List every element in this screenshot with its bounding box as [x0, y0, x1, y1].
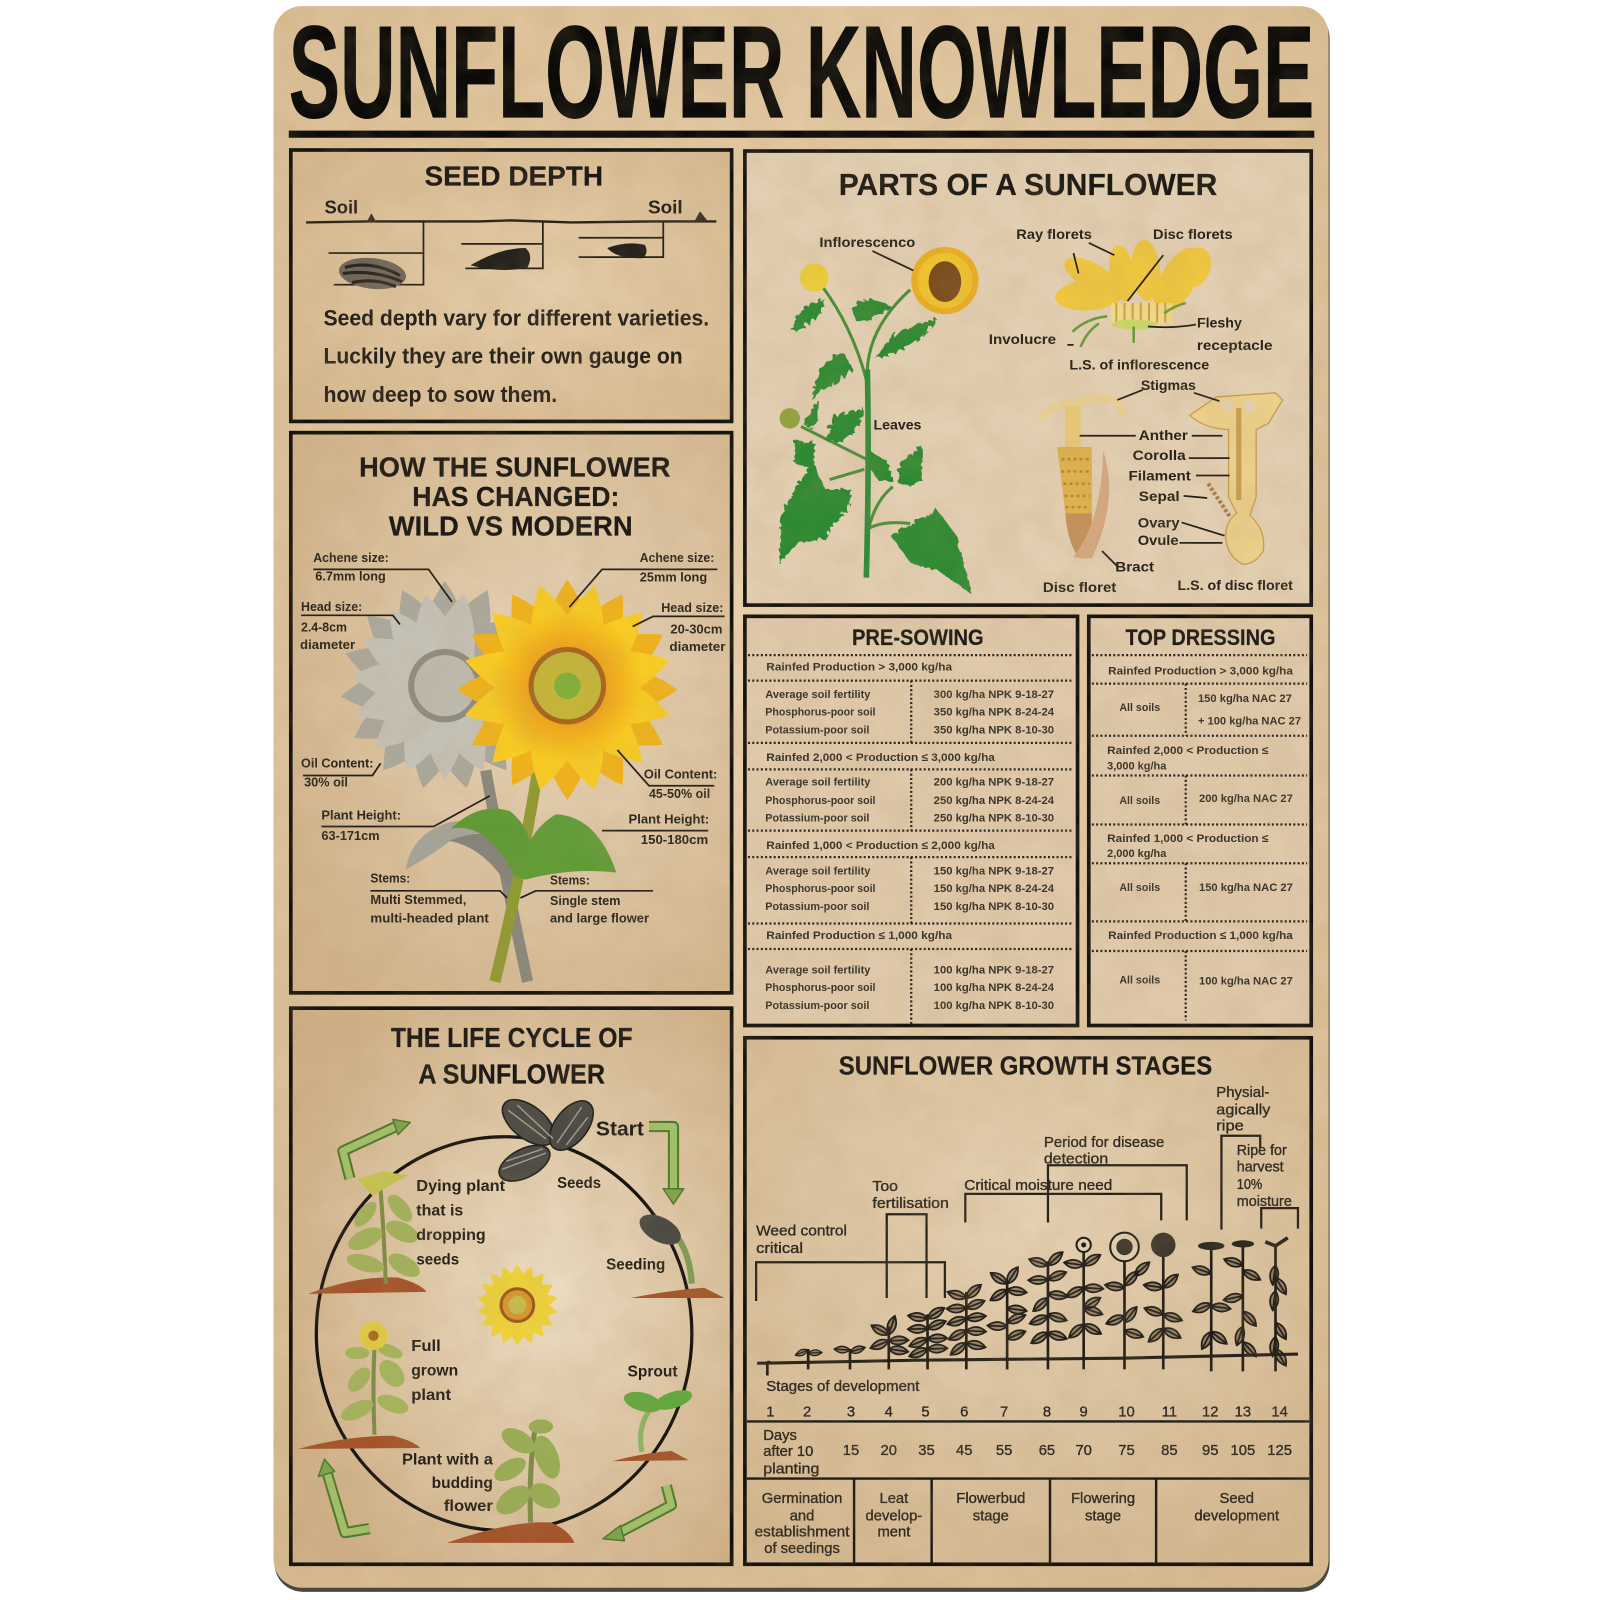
heading: wild vs modern: HAS CHANGED:: [412, 481, 619, 512]
growth phase cells: Flowerbud: [956, 1491, 1025, 1507]
period labels: moisture: [1237, 1194, 1292, 1210]
pre-sowing rows: 250 kg/ha NPK 8-24-24: [934, 795, 1055, 807]
pre-sowing rows: 100 kg/ha NPK 8-10-30: [934, 1000, 1054, 1012]
life cycle labels: Plant with a: [402, 1451, 493, 1468]
plant stage 12: [1191, 1242, 1232, 1371]
days after planting row: 125: [1267, 1443, 1292, 1459]
left annotations: wild: Head size:: [301, 599, 362, 614]
parts labels: Inflorescenco: [819, 235, 916, 251]
left annotations: wild: [300, 550, 507, 925]
left annotations: wild: 63-171cm: [321, 828, 380, 843]
pre-sowing rows: 150 kg/ha NPK 9-18-27: [934, 865, 1054, 877]
pre-sowing rows: Phosphorus-poor soil: [765, 706, 876, 718]
stages of development row: 14: [1271, 1404, 1288, 1420]
left annotations: wild: Multi Stemmed,: [370, 892, 466, 907]
parts labels: Ray florets: [1016, 227, 1092, 243]
stages of development row: 9: [1080, 1404, 1088, 1420]
pre-sowing rows: 300 kg/ha NPK 9-18-27: [934, 689, 1054, 701]
stages of development row: 7: [1000, 1404, 1008, 1420]
stages of development row: 3: [847, 1404, 855, 1420]
seed depth text: Seed depth vary for different varieties.: [323, 306, 709, 331]
right annotations: modern: Single stem: [550, 893, 620, 908]
pre-sowing rows: Phosphorus-poor soil: [765, 982, 876, 994]
days after planting row: planting: [763, 1461, 819, 1477]
heading: life cycle: THE LIFE CYCLE OF: [391, 1022, 633, 1053]
ground line: [757, 1354, 1298, 1363]
period brackets: [756, 1136, 1298, 1301]
right annotations: modern: Head size:: [661, 600, 723, 615]
life cycle labels: seeds: [416, 1251, 459, 1268]
icon: whole sunflower plant: [777, 247, 979, 592]
stages of development row: 1: [766, 1404, 775, 1420]
top dressing rows: [1107, 665, 1301, 988]
life cycle ring: [316, 1137, 692, 1531]
days after planting row: 35: [918, 1443, 935, 1459]
parts labels: L.S. of disc floret: [1178, 578, 1293, 594]
days after planting row: 85: [1161, 1443, 1178, 1459]
pre-sowing rows: 150 kg/ha NPK 8-24-24: [934, 883, 1055, 895]
pre-sowing rows: 350 kg/ha NPK 8-10-30: [934, 725, 1054, 737]
top dressing rows: Rainfed Production > 3,000 kg/ha: [1108, 665, 1294, 677]
top dressing rows: 200 kg/ha NAC 27: [1199, 793, 1293, 805]
period labels: agically: [1216, 1102, 1271, 1118]
top dressing rows: 3,000 kg/ha: [1107, 760, 1167, 772]
icon: center sunflower: [475, 1263, 559, 1347]
panel: life cycle: [291, 1008, 732, 1564]
heading: wild vs modern: WILD VS MODERN: [389, 511, 633, 542]
parts labels: Fleshy: [1197, 316, 1242, 332]
panel: growth stages: [745, 1038, 1311, 1564]
stages of development row: 12: [1202, 1404, 1218, 1420]
plant stage 11: [1143, 1233, 1183, 1369]
top dressing rows: 2,000 kg/ha: [1107, 848, 1167, 860]
period labels: Period for disease: [1044, 1135, 1164, 1151]
parts labels: Filament: [1129, 469, 1191, 485]
right annotations: modern: [520, 550, 726, 925]
stages of development row: 4: [885, 1404, 893, 1420]
life cycle labels: flower: [444, 1498, 493, 1515]
pre-sowing rows: Average soil fertility: [765, 865, 871, 877]
left annotations: wild: multi-headed plant: [370, 910, 490, 925]
left annotations: wild: 2.4-8cm: [301, 620, 347, 635]
pre-sowing rows: 350 kg/ha NPK 8-24-24: [934, 706, 1055, 718]
parts labels: Ovule: [1138, 533, 1179, 549]
pre-sowing rows: 150 kg/ha NPK 8-10-30: [934, 901, 1054, 913]
life cycle labels: plant: [411, 1387, 452, 1404]
left annotations: wild: diameter: [300, 637, 355, 652]
growth phase cells: development: [1194, 1508, 1279, 1524]
plant stage 3: [834, 1344, 866, 1369]
life cycle labels: budding: [432, 1475, 493, 1492]
period labels: detection: [1044, 1151, 1108, 1167]
heading: growth stages: SUNFLOWER GROWTH STAGES: [839, 1052, 1212, 1080]
life cycle labels: grown: [411, 1363, 458, 1380]
parts labels: Anther: [1139, 428, 1188, 444]
right annotations: modern: 20-30cm: [670, 622, 722, 637]
heading: seed depth: SEED DEPTH: [424, 161, 603, 192]
parts labels: receptacle: [1197, 338, 1273, 354]
seed depth diagram: Soil: [648, 196, 683, 217]
life cycle labels: Seeds: [557, 1175, 601, 1192]
days after planting row: Days: [763, 1428, 797, 1444]
heading: parts: PARTS OF A SUNFLOWER: [839, 168, 1217, 202]
period labels: 10%: [1237, 1177, 1262, 1193]
life cycle labels: Seeding: [606, 1256, 665, 1273]
top dressing rows: 100 kg/ha NAC 27: [1199, 976, 1293, 988]
right annotations: modern: diameter: [669, 639, 726, 654]
right annotations: modern: Stems:: [550, 873, 590, 888]
plant stage 13: [1223, 1240, 1262, 1371]
stages of development row: 2: [803, 1404, 811, 1420]
pre-sowing rows: Potassium-poor soil: [765, 812, 869, 824]
plant stage 1: [767, 1362, 770, 1376]
days after planting row: 20: [881, 1443, 897, 1459]
life cycle labels: Sprout: [628, 1364, 678, 1381]
title rule: [289, 131, 1314, 138]
days after planting row: 55: [996, 1443, 1012, 1459]
stages of development row: 6: [960, 1404, 968, 1420]
icon: seedling: [635, 1208, 692, 1284]
pre-sowing rows: Phosphorus-poor soil: [765, 883, 876, 895]
left annotations: wild: Plant Height:: [321, 807, 401, 822]
growth phase cells: and: [790, 1508, 814, 1524]
days after planting row: 95: [1202, 1443, 1218, 1459]
left annotations: wild: 6.7mm long: [315, 569, 386, 584]
stages of development row: 5: [921, 1404, 930, 1420]
period labels: Critical moisture need: [964, 1178, 1112, 1194]
days after planting row: [763, 1428, 1292, 1477]
life cycle labels: Dying plant: [416, 1178, 506, 1195]
heading: wild vs modern: HOW THE SUNFLOWER: [359, 452, 671, 483]
period labels: ripe: [1216, 1119, 1244, 1135]
top dressing rows: + 100 kg/ha NAC 27: [1198, 715, 1301, 727]
life cycle arrows: [318, 1119, 684, 1541]
top dressing rows: 150 kg/ha NAC 27: [1199, 882, 1293, 894]
top dressing rows: Rainfed Production ≤ 1,000 kg/ha: [1108, 930, 1294, 942]
pre-sowing rows: 100 kg/ha NPK 9-18-27: [934, 964, 1054, 976]
life cycle labels: [402, 1119, 678, 1515]
pre-sowing rows: 100 kg/ha NPK 8-24-24: [934, 982, 1055, 994]
growth phase cells: of seedings: [764, 1541, 840, 1557]
parts labels: Sepal: [1139, 489, 1180, 505]
pre-sowing rows: Rainfed Production ≤ 1,000 kg/ha: [766, 930, 953, 942]
pre-sowing rows: Potassium-poor soil: [765, 1000, 869, 1012]
growth phase cells: Germination: [762, 1491, 842, 1507]
pre-sowing rows: Average soil fertility: [765, 777, 871, 789]
parts labels: L.S. of inflorescence: [1069, 357, 1209, 373]
panel: sign background: [273, 6, 1329, 1588]
days after planting row: 15: [843, 1443, 859, 1459]
pre-sowing rows: Phosphorus-poor soil: [765, 795, 876, 807]
plant stage 9: [1063, 1238, 1104, 1369]
right annotations: modern: 45-50% oil: [649, 786, 710, 801]
left annotations: wild: Stems:: [370, 871, 410, 886]
panel: parts of a sunflower: [745, 151, 1311, 605]
plant stage 4: [869, 1315, 909, 1369]
period labels: Ripe for: [1237, 1143, 1287, 1159]
top dressing rows: 150 kg/ha NAC 27: [1198, 693, 1292, 705]
parts labels: Ovary: [1138, 516, 1180, 532]
growth phase cells: establishment: [755, 1525, 849, 1541]
left annotations: wild: Achene size:: [313, 550, 389, 565]
plant stage 10: [1104, 1233, 1153, 1369]
heading: wild vs modern: [359, 452, 671, 542]
top dressing rows: All soils: [1119, 795, 1160, 807]
pre-sowing rows: Potassium-poor soil: [765, 725, 869, 737]
left annotations: wild: Oil Content:: [301, 755, 373, 770]
growth phase cells: stage: [1085, 1508, 1121, 1524]
growth phase cells: Leat: [879, 1491, 908, 1507]
period labels: Too: [872, 1179, 898, 1195]
parts labels: Involucre: [989, 332, 1056, 348]
growth phase cells: Seed: [1219, 1491, 1254, 1507]
period labels: Weed control: [756, 1224, 847, 1240]
days after planting row: 65: [1039, 1443, 1055, 1459]
plant stage 5: [907, 1306, 948, 1369]
top dressing rows: All soils: [1119, 882, 1160, 894]
pre-sowing rows: Average soil fertility: [765, 964, 871, 976]
stages of development row: Stages of development: [766, 1379, 919, 1395]
icon: longitudinal section of inflorescence: [1054, 239, 1216, 347]
panel: seed depth: [291, 150, 732, 421]
period labels: Physial-: [1216, 1085, 1269, 1101]
icon: wild and modern sunflower illustration: [337, 579, 678, 982]
days after planting row: 75: [1118, 1443, 1135, 1459]
panel: how the sunflower has changed: [291, 433, 732, 993]
right annotations: modern: Plant Height:: [629, 811, 709, 826]
top dressing rows: Rainfed 2,000 < Production ≤: [1107, 745, 1268, 757]
pre-sowing rows: Rainfed Production > 3,000 kg/ha: [766, 661, 953, 673]
life cycle labels: Full: [411, 1338, 441, 1355]
pre-sowing rows: [765, 661, 1055, 1012]
parts labels: Stigmas: [1141, 378, 1196, 394]
pre-sowing rows: Average soil fertility: [765, 689, 871, 701]
icon: seeds: [493, 1091, 602, 1189]
stages of development row: 11: [1162, 1404, 1177, 1420]
heading: top dressing: TOP DRESSING: [1126, 625, 1276, 650]
heading: pre-sowing: PRE-SOWING: [852, 625, 984, 650]
panel: top dressing table: [1089, 616, 1311, 1026]
icon: sprout: [622, 1386, 694, 1452]
parts labels: Bract: [1115, 559, 1154, 575]
growth table rules: [747, 1421, 1309, 1564]
stages of development row: 8: [1043, 1404, 1051, 1420]
top dressing rows: All soils: [1119, 975, 1160, 987]
pre-sowing table rules: [748, 655, 1073, 1024]
parts labels: Leaves: [873, 418, 921, 434]
right annotations: modern: Achene size:: [640, 550, 714, 565]
right annotations: modern: Oil Content:: [644, 767, 717, 782]
seed depth text: [323, 306, 709, 407]
plant stage 6: [946, 1283, 987, 1369]
period labels: harvest: [1237, 1159, 1284, 1175]
icon: dying plant: [344, 1171, 424, 1284]
growth phase cells: [755, 1491, 1279, 1557]
pre-sowing rows: Rainfed 1,000 < Production ≤ 2,000 kg/ha: [766, 840, 996, 852]
plant stage 8: [1028, 1250, 1068, 1369]
pre-sowing rows: 250 kg/ha NPK 8-10-30: [934, 812, 1054, 824]
period labels: [756, 1085, 1292, 1257]
top dressing table rules: [1092, 655, 1307, 1020]
heading: life cycle: A SUNFLOWER: [418, 1059, 605, 1090]
period labels: critical: [756, 1241, 803, 1257]
top dressing rows: Rainfed 1,000 < Production ≤: [1107, 833, 1268, 845]
heading: life cycle: [391, 1022, 633, 1090]
life cycle labels: dropping: [416, 1227, 486, 1244]
seed depth text: how deep to sow them.: [323, 382, 557, 407]
growth phase cells: Flowering: [1071, 1491, 1135, 1507]
icon: soil mounds: [298, 1277, 724, 1543]
right annotations: modern: 150-180cm: [641, 832, 708, 847]
seed depth diagram: [306, 196, 716, 292]
growth phase cells: develop-: [866, 1508, 922, 1524]
parts labels: Disc florets: [1153, 227, 1233, 243]
days after planting row: after 10: [763, 1444, 813, 1460]
icon: disc floret: [1039, 390, 1143, 566]
parts labels: Corolla: [1133, 448, 1187, 464]
stages of development row: 13: [1235, 1404, 1251, 1420]
icon: section of disc floret: [1180, 393, 1283, 564]
paper texture: [273, 6, 1329, 1588]
period labels: fertilisation: [872, 1196, 949, 1212]
growth stage plants: [767, 1233, 1288, 1376]
growth phase cells: stage: [973, 1508, 1009, 1524]
seed depth diagram: Soil: [324, 196, 358, 217]
right annotations: modern: 25mm long: [640, 570, 707, 585]
plant stage 7: [987, 1265, 1028, 1369]
growth phase cells: ment: [877, 1525, 910, 1541]
life cycle labels: Start: [596, 1119, 644, 1141]
plant stage 14: [1265, 1238, 1288, 1371]
pre-sowing rows: Potassium-poor soil: [765, 901, 869, 913]
pre-sowing rows: 200 kg/ha NPK 9-18-27: [934, 777, 1054, 789]
icon: full grown plant: [338, 1321, 411, 1435]
seed depth text: Luckily they are their own gauge on: [323, 343, 683, 368]
parts labels: Disc floret: [1043, 580, 1117, 596]
right annotations: modern: and large flower: [550, 910, 649, 925]
days after planting row: 105: [1231, 1443, 1255, 1459]
left annotations: wild: 30% oil: [304, 775, 348, 790]
life cycle labels: that is: [416, 1202, 463, 1219]
days after planting row: 45: [956, 1443, 973, 1459]
panel: pre-sowing table: [745, 616, 1078, 1026]
stages of development row: [766, 1379, 1288, 1420]
parts labels: [819, 227, 1293, 596]
days after planting row: 70: [1075, 1443, 1092, 1459]
stages of development row: 10: [1118, 1404, 1135, 1420]
plant stage 2: [795, 1348, 822, 1369]
top dressing rows: All soils: [1119, 702, 1160, 714]
sign shadow: [274, 9, 1330, 1592]
icon: budding plant: [491, 1419, 565, 1522]
pre-sowing rows: Rainfed 2,000 < Production ≤ 3,000 kg/ha: [766, 752, 996, 764]
